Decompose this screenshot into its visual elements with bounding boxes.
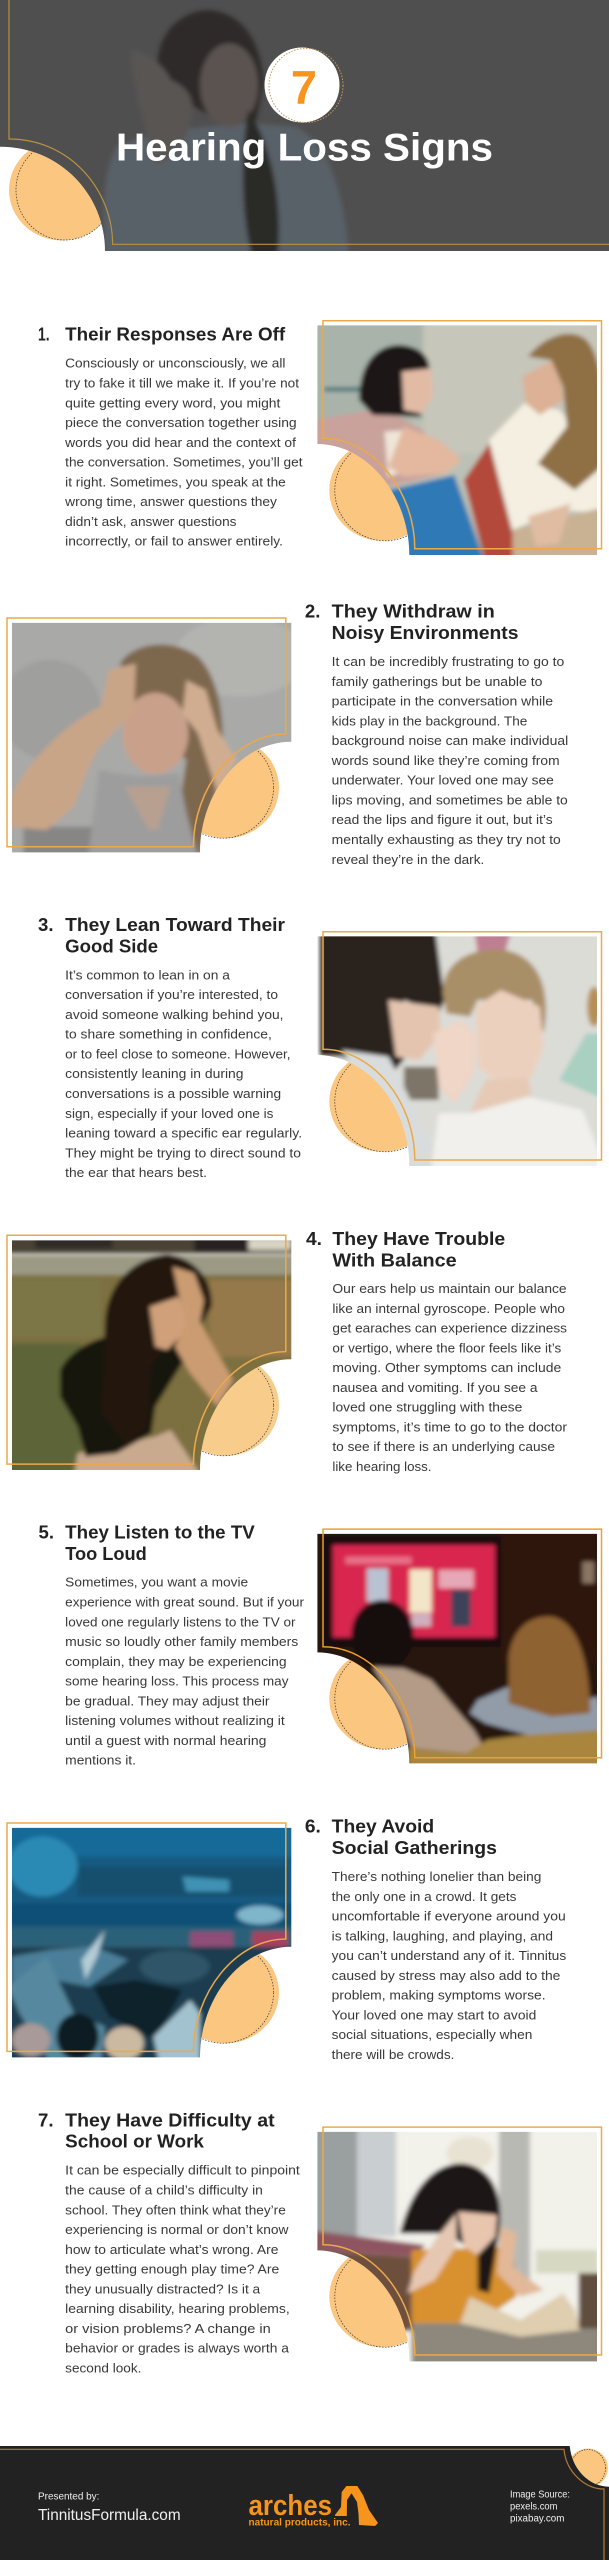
body text 1: wrong time, answer questions they [64, 494, 277, 509]
body text 4: or vertigo, where the floor feels like it’s [332, 1340, 562, 1355]
body text 1: piece the conversation together using [65, 415, 297, 430]
body text 6: you can’t understand any of it. Tinnitus [332, 1948, 567, 1963]
body text 2: participate in the conversation while [332, 694, 553, 709]
photo panel 1: two women talking [311, 320, 606, 563]
body text 4: loved one struggling with these [332, 1400, 522, 1415]
heading 3 [65, 914, 285, 956]
presented by credit: TinnitusFormula.com [38, 2507, 181, 2524]
body text 7: or vision problems? A change in [65, 2321, 271, 2336]
body text 6: problem, making symptoms worse. [332, 1988, 546, 2003]
body text 7: they unusually distracted? Is it a [65, 2281, 261, 2296]
number 3: 3. [38, 914, 54, 935]
body text 1: incorrectly, or fail to answer entirely. [65, 534, 283, 549]
heading 7: They Have Difficulty at [65, 2109, 275, 2130]
heading 4 [332, 1228, 505, 1270]
header photo: woman cupping her ear [103, 10, 349, 257]
body text 2: kids play in the background. The [332, 713, 527, 728]
gold frame 1 [323, 321, 602, 549]
body text 2: read the lips and figure it out, but it’s [332, 812, 553, 827]
arches logo: natural products, inc. [248, 2517, 351, 2529]
body text 7: they getting enough play time? Are [65, 2262, 279, 2277]
body text 5 [65, 1575, 305, 1768]
body text 3: consistently leaning in during [65, 1066, 244, 1081]
body text 1 [64, 356, 303, 549]
heading 2: Noisy Environments [332, 622, 518, 643]
photo panel 5: couple watching television [307, 1523, 609, 1770]
top-left corner notch with peach blob [0, 146, 105, 251]
body text 4: symptoms, it’s time to go to the doctor [332, 1420, 568, 1434]
image source credit: pexels.com [510, 2501, 557, 2512]
section 5: They Listen to the TV Too Loud [38, 1522, 609, 1770]
body text 2: background noise can make individual [332, 733, 568, 748]
heading 5: They Listen to the TV [65, 1522, 255, 1543]
body text 7: how to articulate what’s wrong. Are [65, 2242, 278, 2257]
body text 4: moving. Other symptoms can include [332, 1360, 561, 1375]
gold frame 3 [323, 932, 602, 1160]
body text 4: nausea and vomiting. If you see a [332, 1380, 538, 1395]
body text 1: it right. Sometimes, you speak at the [65, 474, 286, 489]
body text 5: music so loudly other family members [65, 1634, 299, 1649]
body text 3: leaning toward a specific ear regularly. [65, 1126, 302, 1140]
photo panel 6: concert crowd [0, 1820, 307, 2063]
heading 5: Too Loud [65, 1543, 147, 1564]
title: Hearing Loss Signs [116, 127, 493, 170]
gold frame 7 [323, 2127, 602, 2355]
photo panel 7: student reading with glasses [307, 2123, 609, 2370]
section 1: Their Responses Are Off [38, 320, 606, 563]
body text 1: quite getting every word, you might [65, 395, 281, 410]
body text 6: uncomfortable if everyone around you [332, 1909, 566, 1924]
image source credit: Image Source: [510, 2489, 570, 2500]
section 2: They Withdraw in Noisy Environments [0, 601, 568, 867]
heading 3: They Lean Toward Their [65, 914, 285, 935]
body text 7: behavior or grades is always worth a [65, 2341, 290, 2356]
body text 4: get earaches can experience dizziness [332, 1321, 568, 1336]
body text 6: social situations, especially when [332, 2027, 532, 2042]
body text 3: or to feel close to someone. However, [65, 1046, 290, 1061]
gold frame 2 [7, 618, 286, 847]
icon: delicate arch [335, 2486, 378, 2526]
section 7: They Have Difficulty at School or Work [38, 2109, 609, 2376]
body text 3: conversation if you’re interested, to [65, 987, 278, 1002]
footer [0, 2446, 609, 2560]
body text 2: lips moving, and sometimes be able to [332, 792, 568, 808]
presented by credit: Presented by: [38, 2490, 99, 2502]
body text 6: caused by stress may also add to the [332, 1968, 560, 1983]
body text 5: until a guest with normal hearing [65, 1733, 266, 1748]
body text 1: try to fake it till we make it. If you’re not [65, 376, 299, 390]
body text 5: experience with great sound. But if your [65, 1594, 305, 1610]
body text 3: conversations is a possible warning [65, 1086, 281, 1101]
number 5: 5. [38, 1522, 54, 1543]
body text 7 [65, 2163, 300, 2376]
body text 2 [331, 654, 568, 867]
body text 7: learning disability, hearing problems, [65, 2301, 290, 2316]
image source credit [510, 2489, 570, 2525]
body text 3: sign, especially if your loved one is [65, 1106, 274, 1121]
gold frame 4 [7, 1235, 286, 1464]
body text 6: there will be crowds. [332, 2047, 454, 2062]
body text 2: family gatherings but be unable to [332, 674, 542, 689]
body text 3: avoid someone walking behind you, [65, 1007, 284, 1022]
body text 7: experiencing is normal or don’t know [65, 2222, 289, 2237]
number 6: 6. [305, 1816, 321, 1837]
body text 2: It can be incredibly frustrating to go to [332, 654, 564, 669]
body text 1: didn’t ask, answer questions [65, 514, 237, 529]
section 4: They Have Trouble With Balance [0, 1228, 568, 1477]
body text 6: the only one in a crowd. It gets [332, 1889, 517, 1904]
body text 1: the conversation. Sometimes, you’ll get [65, 455, 303, 470]
number 4: 4. [306, 1228, 322, 1249]
body text 7: school. They often think what they’re [65, 2202, 286, 2217]
body text 3: to share something in confidence, [65, 1027, 272, 1042]
body text 5: some hearing loss. This process may [65, 1674, 289, 1689]
body text 5: Sometimes, you want a movie [65, 1575, 248, 1590]
body text 5: mentions it. [65, 1753, 136, 1768]
presented by credit [38, 2490, 181, 2524]
body text 3: They might be trying to direct sound to [65, 1145, 301, 1160]
body text 6: There’s nothing lonelier than being [332, 1869, 541, 1884]
heading 6: They Avoid [332, 1816, 434, 1837]
image source credit: pixabay.com [510, 2514, 564, 2525]
number 2: 2. [305, 601, 320, 622]
body text 5: be gradual. They may adjust their [65, 1693, 270, 1708]
number badge: 7 [291, 61, 317, 114]
arches logo: arches [248, 2490, 332, 2522]
body text 7: the cause of a child’s difficulty in [65, 2182, 263, 2198]
body text 5: listening volumes without realizing it [65, 1713, 285, 1728]
body text 4: to see if there is an underlying cause [332, 1439, 555, 1454]
body text 6: is talking, laughing, and playing, and [332, 1928, 553, 1943]
number 1: 1. [38, 324, 50, 345]
heading 7 [65, 2109, 275, 2152]
heading 7: School or Work [65, 2131, 205, 2152]
gold frame 5 [323, 1529, 602, 1758]
body text 6: Your loved one may start to avoid [332, 2008, 536, 2022]
photo panel 4: woman sitting on grass [0, 1233, 307, 1477]
heading 4: With Balance [332, 1249, 457, 1270]
arches logo [248, 2486, 378, 2529]
photo panel 2: woman holding her head [6, 617, 292, 852]
body text 2: words sound like they’re coming from [331, 753, 560, 768]
header gold frame line [9, 0, 609, 244]
body text 4: Our ears help us maintain our balance [332, 1281, 567, 1296]
body text 3 [65, 967, 302, 1180]
body text 4: like hearing loss. [332, 1459, 432, 1474]
heading 2 [332, 601, 518, 643]
body text 1: Consciously or unconsciously, we all [65, 356, 286, 371]
footer gold line [0, 2449, 604, 2560]
heading 6 [332, 1816, 497, 1858]
gold frame 6 [7, 1823, 286, 2051]
body text 5: loved one regularly listens to the TV or [65, 1614, 296, 1629]
heading 6: Social Gatherings [332, 1837, 497, 1858]
photo panel 3: woman whispering in an ear [320, 927, 607, 1170]
heading 5 [65, 1522, 255, 1564]
body text 7: second look. [65, 2360, 141, 2376]
body text 7: It can be especially difficult to pinpoint [65, 2163, 300, 2178]
body text 5: complain, they may be experiencing [65, 1654, 287, 1669]
heading 3: Good Side [65, 935, 158, 956]
number badge [264, 48, 343, 122]
body text 4: like an internal gyroscope. People who [332, 1301, 565, 1316]
body text 2: reveal they’re in the dark. [332, 852, 484, 867]
number 7: 7. [38, 2109, 54, 2130]
body text 3: It’s common to lean in on a [65, 967, 231, 982]
header banner [0, 0, 609, 257]
body text 3: the ear that hears best. [65, 1165, 207, 1180]
body text 6 [332, 1869, 567, 2062]
section 3: They Lean Toward Their Good Side [38, 914, 607, 1180]
heading 4: They Have Trouble [332, 1228, 505, 1249]
footer corner notch with peach blob [568, 2446, 609, 2488]
body text 4 [332, 1281, 568, 1474]
body text 2: mentally exhausting as they try not to [332, 832, 561, 847]
heading 1: Their Responses Are Off [65, 324, 286, 345]
body text 1: words you did hear and the context of [64, 435, 296, 450]
heading 2: They Withdraw in [332, 601, 495, 622]
body text 2: underwater. Your loved one may see [332, 773, 554, 788]
section 6: They Avoid Social Gatherings [0, 1816, 567, 2063]
